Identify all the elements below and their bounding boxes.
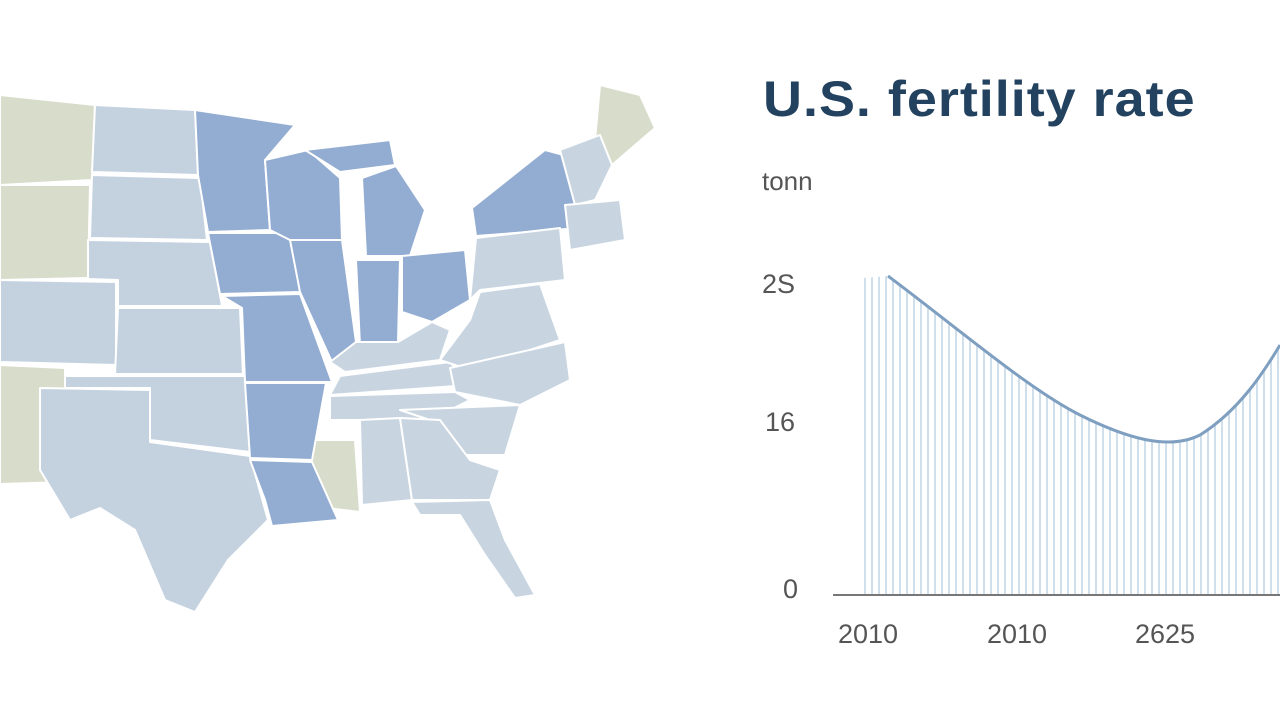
- vertical hatch area: [865, 260, 1278, 595]
- x-axis labels: [838, 619, 1195, 649]
- map: US states: [1, 86, 654, 611]
- plains and south light blue: [0, 105, 268, 612]
- y-axis tick labels: 2S: [762, 269, 795, 299]
- line chart: [833, 274, 1280, 596]
- midwest dark blue: [195, 110, 580, 526]
- x-axis labels: 2625: [1135, 619, 1195, 649]
- y-axis unit label: tonn: [762, 166, 813, 196]
- trend line: [888, 276, 1280, 442]
- y-axis tick labels: 16: [765, 407, 795, 437]
- y-axis tick labels: 0: [783, 574, 798, 604]
- western states beige: [0, 85, 655, 512]
- title: U.S. fertility rate: [763, 71, 1196, 127]
- east light blue: [330, 135, 625, 598]
- y-axis tick labels: [762, 269, 798, 604]
- x-axis labels: 2010: [838, 619, 898, 649]
- x-axis labels: 2010: [987, 619, 1047, 649]
